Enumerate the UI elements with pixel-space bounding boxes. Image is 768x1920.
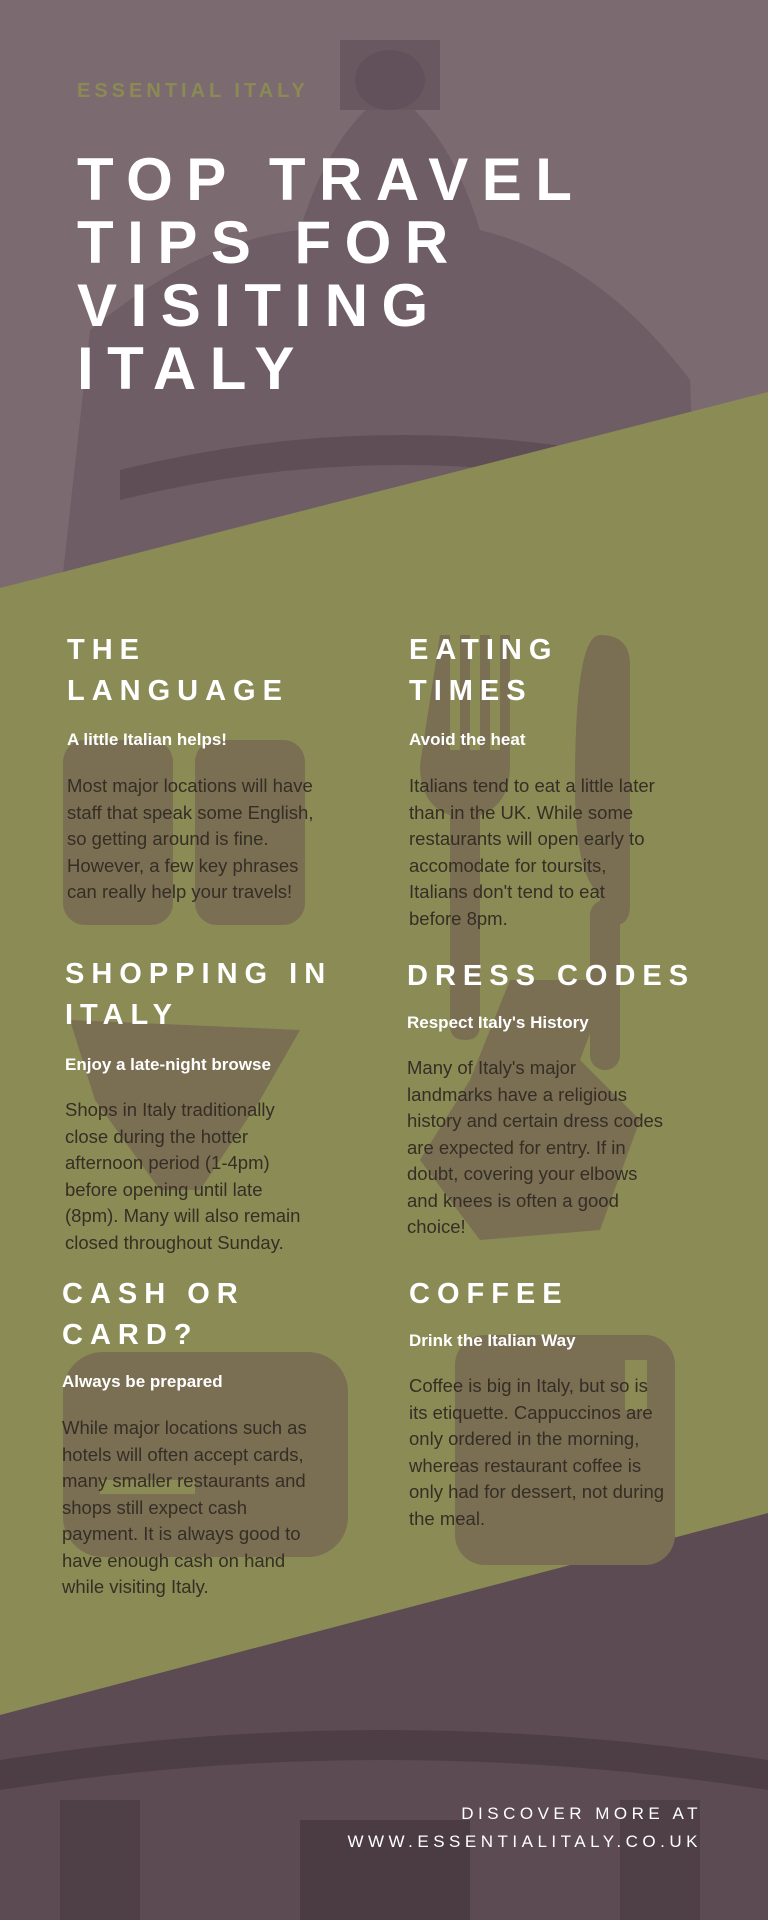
body: shops still expect cash xyxy=(62,1496,247,1518)
title: VISITING xyxy=(77,272,442,339)
body: Coffee is big in Italy, but so is xyxy=(409,1375,648,1396)
body: its etiquette. Cappuccinos are xyxy=(409,1402,653,1422)
panel: shopping in italy xyxy=(65,958,332,1253)
body xyxy=(407,1057,663,1237)
body: Italians tend to eat a little later xyxy=(409,775,655,796)
body: only ordered in the morning, xyxy=(409,1428,639,1449)
panel: dress codes xyxy=(407,960,695,1237)
body: However, a few key phrases xyxy=(67,854,298,876)
body: (8pm). Many will also remain xyxy=(65,1205,300,1226)
heading xyxy=(409,634,558,707)
heading xyxy=(62,1278,245,1351)
body: while visiting Italy. xyxy=(62,1576,209,1597)
heading: THE xyxy=(67,634,146,666)
title: TOP TRAVEL xyxy=(77,146,585,213)
body: close during the hotter xyxy=(65,1126,248,1146)
body: Most major locations will have xyxy=(67,775,313,796)
body: afternoon period (1-4pm) xyxy=(65,1152,270,1173)
brand label: ESSENTIAL ITALY xyxy=(77,80,309,102)
body: the meal. xyxy=(409,1508,485,1528)
heading: LANGUAGE xyxy=(67,675,289,707)
body: landmarks have a religious xyxy=(407,1084,627,1104)
body: many smaller restaurants and xyxy=(62,1470,306,1491)
icon: fork and knife xyxy=(420,635,630,1070)
title xyxy=(77,146,585,402)
body xyxy=(62,1417,307,1597)
body: before 8pm. xyxy=(409,908,508,928)
body: have enough cash on hand xyxy=(62,1550,285,1570)
body: payment. It is always good to xyxy=(62,1523,301,1544)
body: restaurants will open early to xyxy=(409,828,644,849)
heading: ITALY xyxy=(65,999,179,1031)
icon: phone xyxy=(63,740,305,925)
body xyxy=(67,775,313,902)
subtitle: Enjoy a late-night browse xyxy=(65,1055,271,1074)
body: accomodate for toursits, xyxy=(409,854,606,876)
footer call to action: WWW.ESSENTIALITALY.CO.UK xyxy=(347,1832,702,1851)
subtitle: Avoid the heat xyxy=(409,730,526,749)
subtitle: Always be prepared xyxy=(62,1372,223,1391)
body: history and certain dress codes xyxy=(407,1110,663,1131)
body: While major locations such as xyxy=(62,1417,307,1438)
body: Many of Italy's major xyxy=(407,1057,576,1078)
heading: CARD? xyxy=(62,1319,198,1351)
panel: coffee xyxy=(409,1278,664,1528)
icon: tie / scissors shapes xyxy=(70,980,640,1240)
panel: cash or card xyxy=(62,1278,307,1597)
body xyxy=(409,1375,664,1528)
body: Shops in Italy traditionally xyxy=(65,1099,275,1120)
footer call to action xyxy=(347,1804,702,1851)
panel: eating times xyxy=(409,634,655,929)
title: ITALY xyxy=(77,335,308,402)
body: before opening until late xyxy=(65,1178,262,1200)
body: can really help your travels! xyxy=(67,881,292,902)
subtitle: Respect Italy's History xyxy=(407,1013,589,1032)
body xyxy=(65,1099,300,1253)
heading: CASH OR xyxy=(62,1278,245,1310)
heading: EATING xyxy=(409,634,558,666)
panel: the language xyxy=(67,634,313,902)
body: are expected for entry. If in xyxy=(407,1136,626,1158)
heading xyxy=(67,634,289,707)
heading: DRESS CODES xyxy=(407,960,695,992)
body: choice! xyxy=(407,1216,466,1237)
body: than in the UK. While some xyxy=(409,802,633,822)
subtitle: Drink the Italian Way xyxy=(409,1331,576,1350)
body: only had for dessert, not during xyxy=(409,1481,664,1502)
body xyxy=(409,775,655,929)
body: closed throughout Sunday. xyxy=(65,1232,284,1252)
title: TIPS FOR xyxy=(77,209,462,276)
body: doubt, covering your elbows xyxy=(407,1163,637,1184)
footer call to action: DISCOVER MORE AT xyxy=(461,1804,702,1823)
body: and knees is often a good xyxy=(407,1190,619,1210)
body: staff that speak some English, xyxy=(67,802,313,822)
heading: COFFEE xyxy=(409,1278,569,1310)
heading: TIMES xyxy=(409,675,533,707)
icon: wallet/card xyxy=(63,1335,675,1565)
body: so getting around is fine. xyxy=(67,828,269,849)
body: whereas restaurant coffee is xyxy=(409,1454,641,1476)
heading: SHOPPING IN xyxy=(65,958,332,990)
heading xyxy=(65,958,332,1031)
body: hotels will often accept cards, xyxy=(62,1444,304,1464)
body: Italians don't tend to eat xyxy=(409,881,605,902)
subtitle: A little Italian helps! xyxy=(67,730,227,749)
